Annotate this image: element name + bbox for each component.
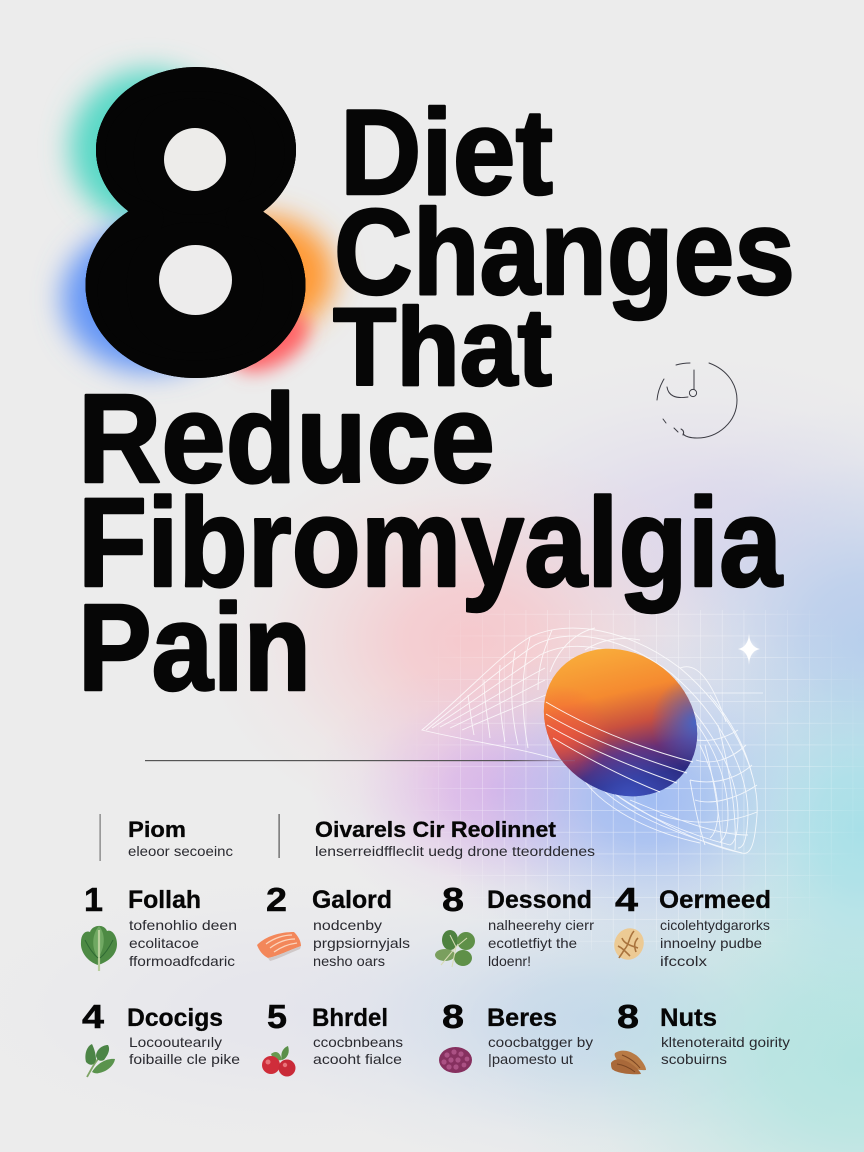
item 7: |paomesto ut xyxy=(488,1051,573,1067)
title: Diet xyxy=(340,84,553,220)
icon: herb leaves xyxy=(435,930,475,967)
item 4: ifccolx xyxy=(660,953,707,969)
icon: raspberry xyxy=(439,1047,472,1073)
section header: left xyxy=(100,814,233,861)
title xyxy=(78,84,795,717)
icon: almonds xyxy=(611,1051,646,1074)
item 4: 4 xyxy=(615,881,639,918)
item 5: Locooutearıly xyxy=(129,1034,222,1050)
gradient sphere xyxy=(544,648,698,796)
item 8: Nuts xyxy=(660,1004,717,1032)
item 6: ccocbnbeans xyxy=(313,1034,403,1050)
item 8 xyxy=(611,998,790,1074)
item 8: scobuirns xyxy=(661,1051,727,1067)
title: That xyxy=(333,286,552,409)
item 1: Follah xyxy=(128,886,201,914)
background grid xyxy=(400,610,864,950)
section header: right: lenserreidffleclit uedg drone tteorddenes xyxy=(315,844,595,859)
item 1: fformoadfcdaric xyxy=(129,953,235,969)
title: Reduce xyxy=(78,368,495,509)
section header: right xyxy=(278,814,595,859)
title: Fibromyalgia xyxy=(78,472,783,613)
section header: right: Oivarels Cir Reolinnet xyxy=(315,817,557,842)
item 3: Dessond xyxy=(487,886,592,914)
item 1: tofenohlio deen xyxy=(129,917,237,933)
item 4: Oermeed xyxy=(659,886,771,914)
item 4: cicolehtydgarorks xyxy=(660,917,770,933)
item 7: coocbatgger by xyxy=(488,1034,593,1050)
item 2: Galord xyxy=(312,886,392,914)
item 8: kltenoteraitd goirity xyxy=(661,1034,790,1050)
item 6: 5 xyxy=(267,998,287,1035)
icon: clock sketch xyxy=(657,363,737,438)
icon: walnut xyxy=(609,923,649,965)
divider line xyxy=(145,760,575,761)
section header: left: Piom xyxy=(128,817,186,842)
icon: leafy greens xyxy=(85,1044,115,1077)
glow behind big eight xyxy=(62,70,334,384)
item 1: ecolitacoe xyxy=(129,935,199,951)
item 4: innoelny pudbe xyxy=(660,935,762,951)
icon: sparkle star xyxy=(738,633,760,665)
title: Pain xyxy=(78,580,311,717)
item 6 xyxy=(262,998,403,1076)
icon: cherries xyxy=(262,1046,296,1076)
item 2: 2 xyxy=(266,881,287,918)
section header: left: eleoor secoeinc xyxy=(128,844,233,859)
item 3: ldoenr! xyxy=(488,953,531,969)
big number 8 xyxy=(86,67,306,378)
item 1 xyxy=(81,881,237,971)
item 2 xyxy=(257,881,410,969)
item 6: acooht fialce xyxy=(313,1051,402,1067)
item 3: nalheerehy cierr xyxy=(488,917,594,933)
wireframe mesh xyxy=(422,628,763,853)
item 5 xyxy=(82,998,240,1077)
item 6: Bhrdel xyxy=(312,1004,388,1032)
icon: salmon fillet xyxy=(257,932,301,961)
item 5: Dcocigs xyxy=(127,1004,223,1032)
item 1: 1 xyxy=(84,881,103,918)
item 3: ecotletfiyt the xyxy=(488,935,577,951)
item 7: Beres xyxy=(487,1004,557,1032)
item 8: 8 xyxy=(617,998,639,1035)
big number 8: 8 xyxy=(64,0,326,464)
item 3: 8 xyxy=(442,881,464,918)
item 2: nesho oars xyxy=(313,953,385,969)
title: Changes xyxy=(334,184,795,320)
item 5: foibaille cle pike xyxy=(129,1051,240,1067)
item 2: prgpsiornyjals xyxy=(313,935,410,951)
icon: spinach leaf xyxy=(81,926,117,971)
item 5: 4 xyxy=(82,998,105,1035)
item 3 xyxy=(435,881,594,969)
item 7: 8 xyxy=(442,998,464,1035)
item 7 xyxy=(439,998,593,1073)
item 4 xyxy=(609,881,771,969)
item 2: nodcenby xyxy=(313,917,382,933)
